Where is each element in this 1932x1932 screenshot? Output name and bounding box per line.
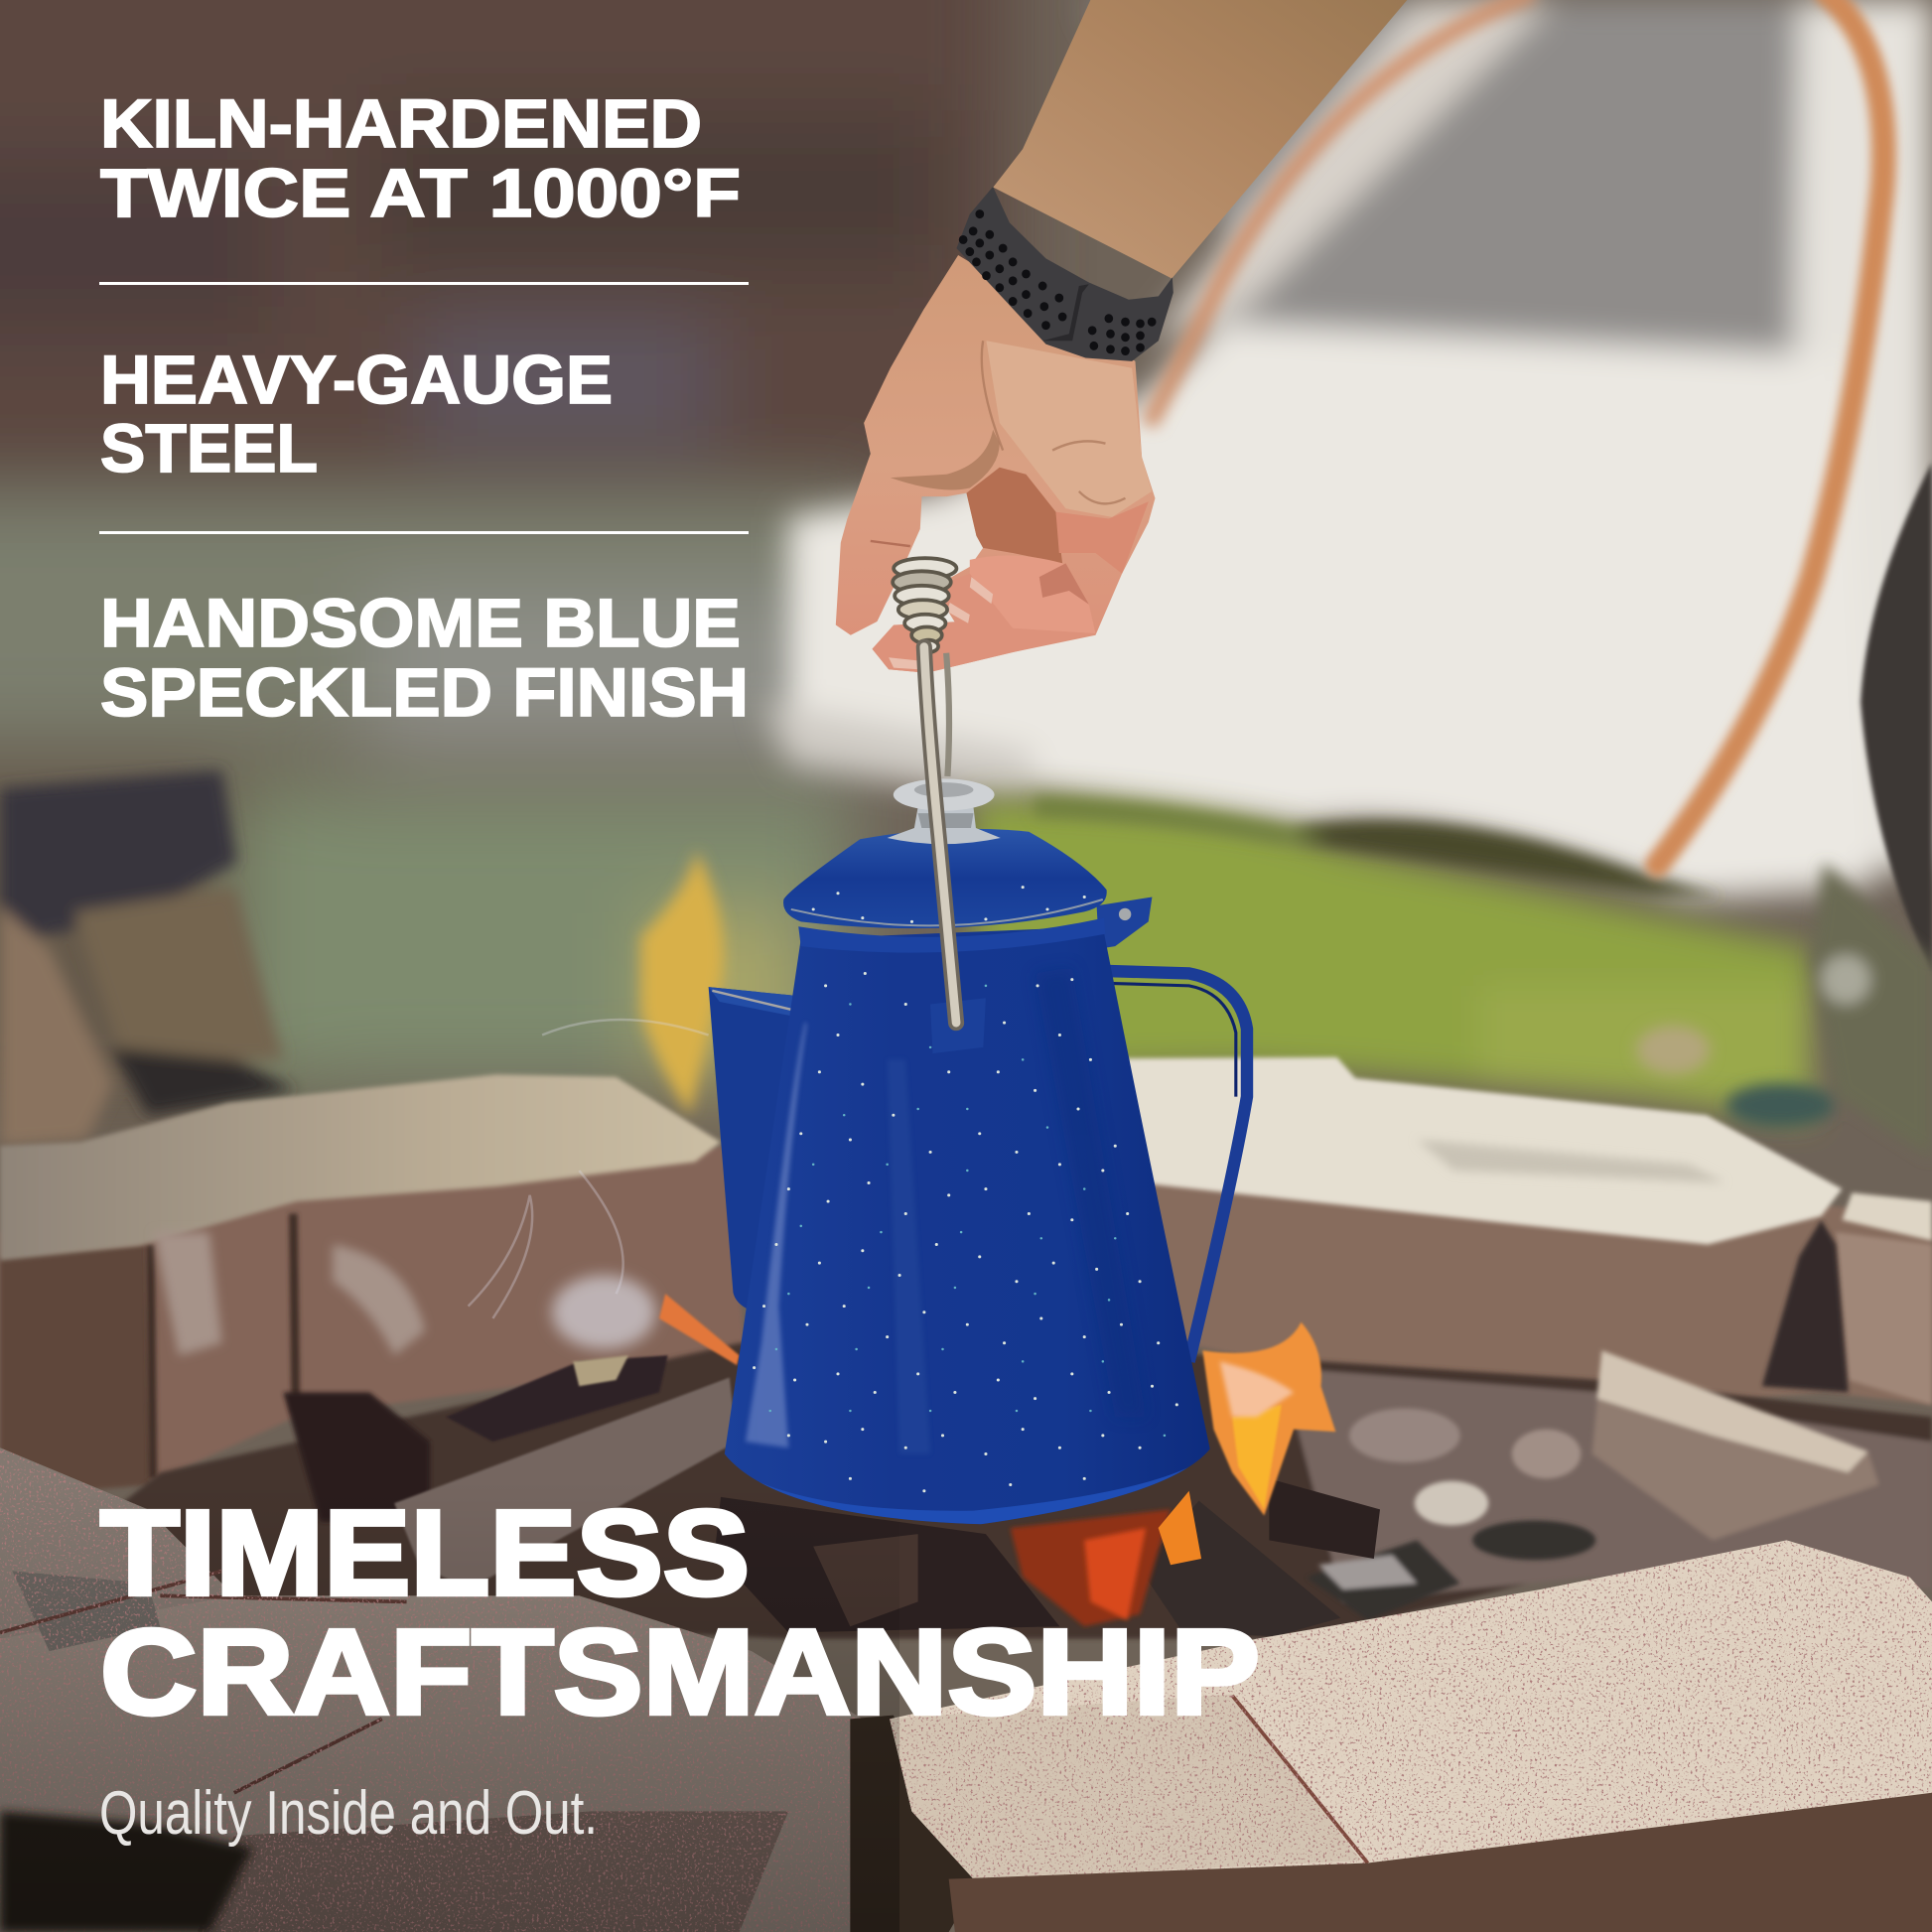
- perforations: [963, 214, 1152, 351]
- knuckle shadow: [891, 430, 1000, 489]
- rear bail wire: [946, 653, 949, 776]
- blurred grey ground and white tent: [763, 0, 1932, 899]
- wrist crease: [982, 341, 1125, 503]
- stone joint: [150, 1213, 296, 1478]
- spout: [709, 987, 807, 1310]
- smoke wisps: [469, 1020, 709, 1318]
- headline: heavy-gauge steel: STEEL: [100, 410, 318, 486]
- hand: [836, 255, 1155, 673]
- headline: handsome blue speckled finish: HANDSOME BLUE: [100, 585, 741, 661]
- bail strap: [930, 998, 986, 1053]
- dark corner shadow: [0, 1811, 252, 1932]
- back right stone: [1124, 1057, 1932, 1417]
- hinge: [1097, 897, 1152, 949]
- left blurred rocks: [0, 770, 296, 1146]
- hand and watch: [836, 187, 1173, 673]
- logs and coals: [283, 1355, 1380, 1636]
- main title: [100, 1485, 1260, 1739]
- body highlights: [745, 972, 1188, 1525]
- grass shadow: [1035, 798, 1725, 897]
- side handle: [1107, 971, 1247, 1361]
- pale ash patches: [154, 1232, 425, 1355]
- stone gap: [850, 1716, 980, 1932]
- forearm: [993, 0, 1407, 278]
- tagline: Quality Inside and Out.: [99, 1779, 598, 1848]
- fire pit interior: [0, 1343, 1932, 1639]
- divider one: [99, 282, 749, 285]
- stone top surface: [0, 1074, 721, 1261]
- body: [725, 926, 1210, 1524]
- headline: kiln-hardened: [100, 85, 741, 231]
- background shrub and clutter: [1636, 863, 1932, 1159]
- left flame glow: [640, 850, 724, 1115]
- index crease: [871, 541, 910, 546]
- lid: [783, 829, 1107, 928]
- coffee pot: [709, 647, 1247, 1528]
- glass knob: [888, 778, 1001, 844]
- headline: kiln-hardened: TWICE AT 1000°F: [100, 155, 741, 231]
- speckles: [755, 973, 1176, 1491]
- bail wire: [924, 647, 956, 1023]
- headline: heavy-gauge steel: [100, 342, 613, 486]
- main title: CRAFTSMANSHIP: [100, 1604, 1260, 1739]
- grass: [973, 801, 1811, 1121]
- watch band: [956, 187, 1173, 361]
- foreground stone right: [890, 1540, 1932, 1879]
- curled finger: [970, 555, 1095, 633]
- flames and embers: [659, 1294, 1335, 1626]
- bottom gradient overlay: [0, 1478, 899, 1932]
- headline: kiln-hardened: KILN-HARDENED: [100, 85, 702, 162]
- foreground stone left: [0, 1448, 863, 1932]
- foreground stone right lower face: [949, 1793, 1932, 1932]
- headline: handsome blue speckled finish: [100, 585, 749, 731]
- right side leg: [1861, 462, 1932, 973]
- ash and small stone in the pit: [1307, 1350, 1879, 1620]
- lit back of hand: [986, 341, 1152, 517]
- orange guy lines: [1152, 0, 1883, 865]
- main title: TIMELESS: [100, 1485, 750, 1620]
- lower finger: [872, 574, 1095, 673]
- stone face: [0, 1146, 746, 1497]
- headline: heavy-gauge steel: HEAVY-GAUGE: [100, 342, 613, 418]
- finger nails: [889, 577, 993, 669]
- lid rim: [798, 918, 1105, 953]
- palm shadow: [966, 468, 1062, 563]
- blurred backdrop: wall, lawn and tent: [0, 0, 1011, 1121]
- back left stone: [0, 1074, 746, 1497]
- lower palm: [1055, 501, 1149, 574]
- headline: handsome blue speckled finish: SPECKLED FINISH: [100, 654, 749, 731]
- divider two: [99, 531, 749, 534]
- dark left block: [0, 1245, 150, 1497]
- spring grip: [893, 558, 956, 652]
